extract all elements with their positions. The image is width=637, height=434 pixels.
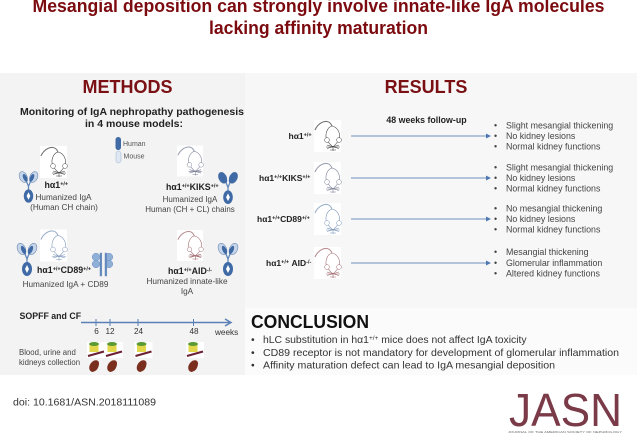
- timeline: weeks: [214, 328, 238, 337]
- model: AID: -/-: [207, 268, 212, 274]
- conclusion heading: CONCLUSION: [251, 312, 369, 332]
- model: KIKS: hα1: [166, 182, 182, 192]
- row: KIKS: •: [494, 184, 497, 194]
- icons: sample collection: [87, 342, 204, 372]
- conclusion bullets: •: [251, 360, 255, 372]
- row: KIKS: •: [494, 173, 497, 183]
- model: CD89: hα1: [37, 265, 53, 275]
- row: AID: Altered kidney functions: [506, 268, 600, 278]
- conclusion bullets: mice does not affect IgA toxicity: [378, 335, 527, 346]
- panel: conclusion: [245, 308, 637, 375]
- follow-up label: 48 weeks follow-up: [386, 115, 467, 125]
- row: ha1: •: [494, 131, 497, 141]
- row: KIKS: •: [494, 162, 497, 172]
- model: KIKS: +/+: [182, 184, 190, 190]
- timeline: 6: [94, 327, 99, 336]
- row: KIKS: +/+: [274, 175, 282, 181]
- row: AID: •: [494, 258, 497, 268]
- row: AID: hα1: [266, 258, 281, 268]
- legend: human and mouse: [116, 137, 146, 163]
- row: KIKS: No kidney lesions: [506, 173, 576, 183]
- conclusion bullets: CD89 receptor is not mandatory for development of glomerular inflammation: [263, 348, 619, 359]
- model: KIKS: +/+: [211, 184, 219, 190]
- row: ha1: +/+: [304, 133, 312, 139]
- row: AID: •: [494, 268, 497, 278]
- row: ha1: Normal kidney functions: [506, 142, 601, 152]
- doi: doi: 10.1681/ASN.2018111089: [13, 398, 156, 408]
- row: ha1: [288, 120, 613, 152]
- row: CD89: CD89: [280, 214, 302, 224]
- model: AID: IgA: [181, 287, 194, 296]
- results heading: RESULTS: [385, 77, 467, 97]
- model: AID: AID: [192, 266, 207, 276]
- model: ha1: (Human CH chain): [30, 203, 98, 212]
- model: AID: [146, 230, 240, 296]
- conclusion bullets: Affinity maturation defect can lead to IgA mesangial deposition: [263, 360, 555, 372]
- model: ha1: +/+: [60, 182, 68, 188]
- row: ha1: hα1: [288, 131, 304, 141]
- model: AID: Humanized innate-like: [146, 277, 228, 286]
- conclusion bullets: [251, 335, 619, 372]
- conclusion bullets: hLC substitution in hα1: [263, 335, 369, 346]
- model: KIKS: KIKS: [190, 182, 211, 192]
- conclusion bullets: +/+: [369, 335, 379, 342]
- model: KIKS: [145, 146, 239, 214]
- title: lacking affinity maturation: [209, 18, 428, 38]
- model: KIKS: Human (CH + CL) chains: [145, 205, 235, 214]
- model: KIKS: Humanized IgA: [163, 195, 218, 204]
- row: CD89: +/+: [302, 216, 310, 222]
- row: CD89: +/+: [272, 216, 280, 222]
- model: AID: hα1: [168, 266, 184, 276]
- collection label: [19, 348, 80, 367]
- collection label: Blood, urine and: [19, 348, 76, 357]
- row: CD89: •: [494, 214, 497, 224]
- model: CD89: Humanized IgA + CD89: [23, 280, 109, 289]
- methods heading: METHODS: [82, 77, 172, 97]
- timeline: 24: [134, 327, 143, 336]
- row: CD89: •: [494, 204, 497, 214]
- row: ha1: No kidney lesions: [506, 131, 576, 141]
- methods subtitle: in 4 mouse models:: [85, 118, 183, 130]
- row: CD89: •: [494, 224, 497, 234]
- model: ha1: [17, 146, 98, 212]
- row: CD89: [257, 203, 602, 235]
- row: AID: Mesangial thickening: [506, 247, 589, 257]
- timeline: 48: [189, 327, 199, 336]
- model: AID: +/+: [184, 268, 192, 274]
- row: AID: -/-: [306, 260, 311, 266]
- model: CD89: +/+: [83, 266, 91, 272]
- row: KIKS: [259, 162, 613, 194]
- row: AID: Glomerular inflammation: [506, 258, 602, 268]
- row: AID: •: [494, 247, 497, 257]
- row: CD89: Normal kidney functions: [506, 224, 601, 234]
- conclusion bullets: •: [251, 335, 255, 346]
- row: ha1: •: [494, 142, 497, 152]
- row: KIKS: KIKS: [282, 173, 303, 183]
- title: [32, 0, 604, 38]
- collection label: kidneys collection: [19, 358, 80, 367]
- row: AID: [266, 247, 602, 279]
- logo: JASN: JOURNAL OF THE AMERICAN SOCIETY OF NEPHROLOGY: [508, 430, 622, 434]
- row: AID: AID: [289, 258, 306, 268]
- methods subtitle: Monitoring of IgA nephropathy pathogenesis: [20, 106, 244, 118]
- row: KIKS: Normal kidney functions: [506, 184, 601, 194]
- methods subtitle: [20, 106, 244, 130]
- conclusion bullets: •: [251, 348, 255, 359]
- legend: human and mouse: Mouse: [124, 154, 145, 160]
- row: AID: +/+: [281, 260, 289, 266]
- row: KIKS: +/+: [302, 175, 310, 181]
- row: ha1: Slight mesangial thickening: [506, 120, 613, 130]
- row: CD89: No kidney lesions: [506, 214, 576, 224]
- model: ha1: Humanized IgA: [36, 193, 92, 202]
- panel: results: [245, 73, 637, 308]
- timeline: SOPFF and CF: [20, 311, 82, 321]
- timeline: [20, 311, 238, 337]
- model: CD89: +/+: [53, 266, 61, 272]
- row: CD89: hα1: [257, 214, 272, 224]
- row: CD89: No mesangial thickening: [506, 204, 602, 214]
- model: CD89: [15, 230, 113, 289]
- icon: CD89 receptor: [92, 253, 113, 276]
- row: KIKS: Slight mesangial thickening: [506, 162, 613, 172]
- legend: human and mouse: Human: [123, 141, 146, 148]
- row: KIKS: hα1: [259, 173, 274, 183]
- timeline: 12: [105, 327, 115, 336]
- row: ha1: •: [494, 120, 497, 130]
- panel: methods: [0, 73, 245, 375]
- model: CD89: CD89: [61, 265, 83, 275]
- model: ha1: hα1: [44, 180, 60, 190]
